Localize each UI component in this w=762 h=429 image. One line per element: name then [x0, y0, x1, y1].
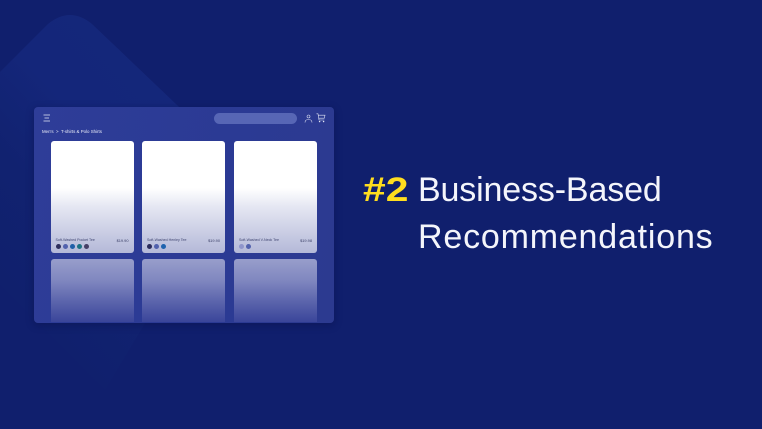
- heading number: #2: [363, 171, 408, 209]
- price 2: $19.90: [208, 238, 220, 243]
- faded product card 4: [50, 259, 134, 322]
- icon: user: [304, 114, 312, 122]
- product name 1: Soft-Washed Pocket Tee: [56, 238, 95, 242]
- product card 1: [50, 141, 134, 253]
- product card 3: [234, 141, 317, 253]
- product name 3: Soft-Washed V-Neck Tee: [239, 238, 279, 242]
- search bar: [214, 112, 297, 124]
- product card 2: [142, 141, 225, 253]
- heading text line 1: Business-Based: [418, 171, 662, 209]
- panel: product page mockup: [34, 107, 334, 323]
- icon: hamburger menu: [44, 114, 50, 122]
- heading text line 2: Recommendations: [418, 218, 713, 256]
- product name 2: Soft-Washed Henley Tee: [147, 238, 187, 242]
- icon: shopping cart: [316, 114, 326, 122]
- heading: [363, 171, 713, 256]
- colour swatches 3: [239, 244, 251, 249]
- breadcrumb: Men's > T-shirts & Polo Shirts: [42, 128, 102, 134]
- colour swatches 1: [56, 244, 89, 249]
- price 3: $19.98: [300, 238, 312, 243]
- faded product card 5: [142, 259, 225, 322]
- price 1: $19.90: [117, 238, 128, 243]
- colour swatches 2: [147, 244, 166, 249]
- faded product card 6: [234, 259, 317, 322]
